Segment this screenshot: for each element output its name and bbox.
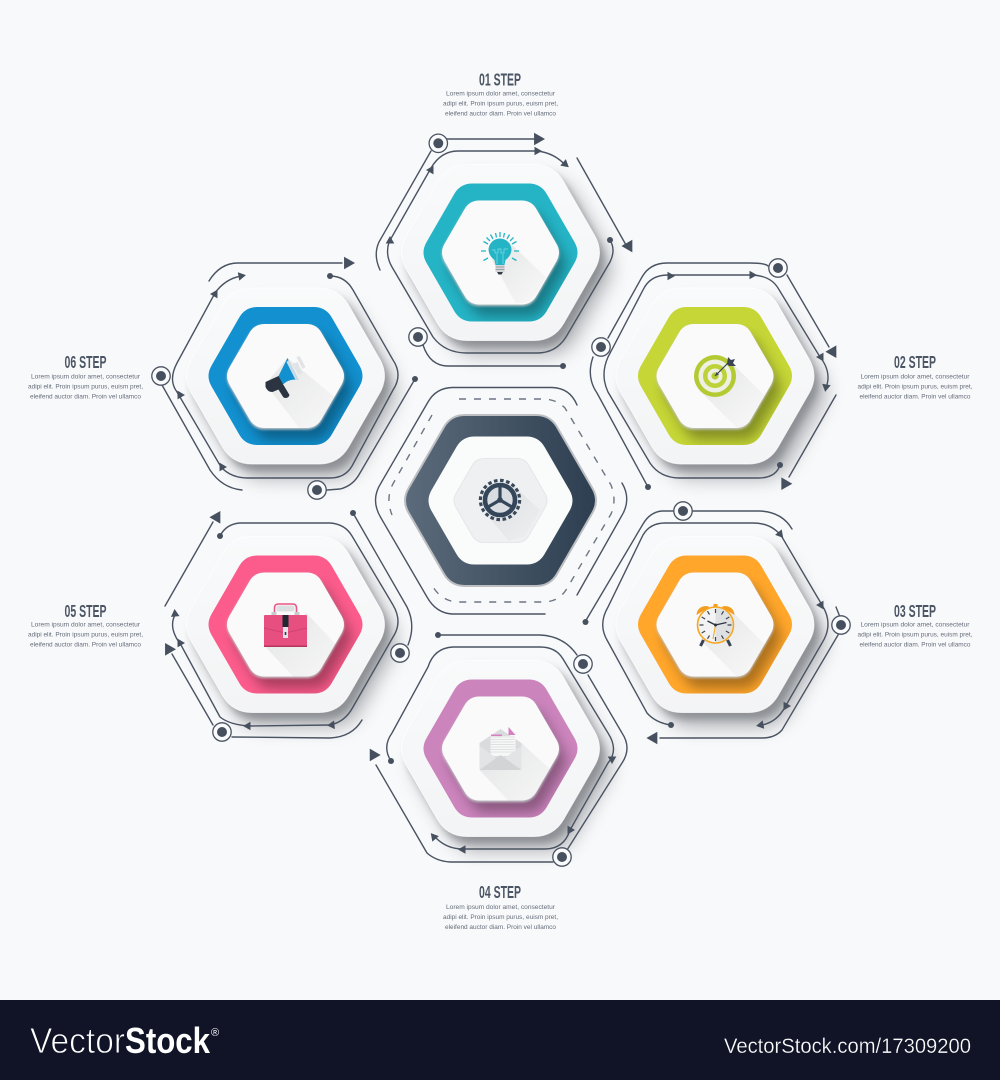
text block: step 4: adipi elit. Proin ipsum purus, euism pret, [443,914,558,921]
footer bar [0,1000,1000,1080]
text block: step 1: eleifend auctor diam. Proin vel ullamco [445,110,556,118]
hexagon stack: pink [186,536,396,728]
panel: step 4 [364,632,627,931]
arrows and nodes: step 5 [160,508,409,741]
logo wordmark: Stock [125,1020,211,1061]
hexagon stack: orange [616,536,826,728]
text block: step 2: adipi elit. Proin ipsum purus, euism pret, [858,384,973,390]
icon: gear [480,480,520,520]
hexagon stack: green [616,288,826,479]
panel: step 2 [590,259,973,493]
arrows and nodes: step 4 [364,632,616,866]
heading: 05 step: 05 STEP [64,601,107,621]
text block: step 4: Lorem ipsum dolor amet, consectetur [446,904,556,911]
text block: step 1: adipi elit. Proin ipsum purus, euism pret, [443,100,558,108]
heading: 06 step: 06 STEP [64,352,107,372]
panel: step 3 [582,502,973,744]
arrows and nodes: step 1 [386,133,638,369]
circuit lines: step 6 [162,263,415,490]
panel: step 1 [376,70,638,369]
heading: 04 step: 04 STEP [479,882,521,902]
arrows and nodes: step 6 [152,257,418,499]
circuit lines: centre [376,388,627,614]
logo wordmark: Vector [30,1020,125,1061]
heading: 01 step: 01 STEP [479,70,521,90]
text block: step 1: Lorem ipsum dolor amet, consectetur [446,90,556,98]
heading: 03 step: 03 STEP [894,601,936,621]
icon: briefcase [264,603,334,676]
logo wordmark: ® [211,1027,219,1039]
text block: step 2: eleifend auctor diam. Proin vel ullamco [860,394,971,400]
icon: target [694,355,758,418]
arrows and nodes: step 3 [582,502,850,744]
text block: step 3: Lorem ipsum dolor amet, consectetur [860,622,970,628]
text block: step 5: Lorem ipsum dolor amet, consectetur [31,622,141,628]
arrows and nodes: step 2 [592,259,842,493]
footer url: VectorStock.com/17309200 [724,1035,971,1058]
hexagon stack: purple [402,660,612,852]
circuit lines: step 5 [165,513,412,738]
text block: step 5: adipi elit. Proin ipsum purus, euism pret, [28,632,143,638]
hexagon stack: blue [186,288,396,479]
panel: step 6 [28,257,418,499]
text block: step 6: Lorem ipsum dolor amet, consectetur [31,374,141,380]
text block: step 6: eleifend auctor diam. Proin vel ullamco [30,394,141,400]
text block: step 3: adipi elit. Proin ipsum purus, euism pret, [858,632,973,638]
panel: step 5 [28,508,412,741]
text block: step 3: eleifend auctor diam. Proin vel ullamco [860,642,971,648]
icon: light bulb [481,232,538,300]
text block: step 6: adipi elit. Proin ipsum purus, euism pret, [28,384,143,390]
hexagon stack: centre [405,415,596,586]
text block: step 2: Lorem ipsum dolor amet, consectetur [860,374,970,380]
circuit lines: step 2 [590,263,836,487]
hexagon stack: teal [402,164,612,356]
heading: 02 step: 02 STEP [894,352,936,372]
icon: megaphone [266,356,328,424]
circuit lines: step 4 [376,635,627,862]
circuit lines: step 3 [585,511,840,738]
icon: envelope [480,727,550,800]
icon: alarm clock [696,604,758,668]
circuit lines: step 1 [376,139,626,366]
text block: step 4: eleifend auctor diam. Proin vel ullamco [445,924,556,931]
panel: central gear hexagon [376,388,627,614]
text block: step 5: eleifend auctor diam. Proin vel ullamco [30,642,141,648]
